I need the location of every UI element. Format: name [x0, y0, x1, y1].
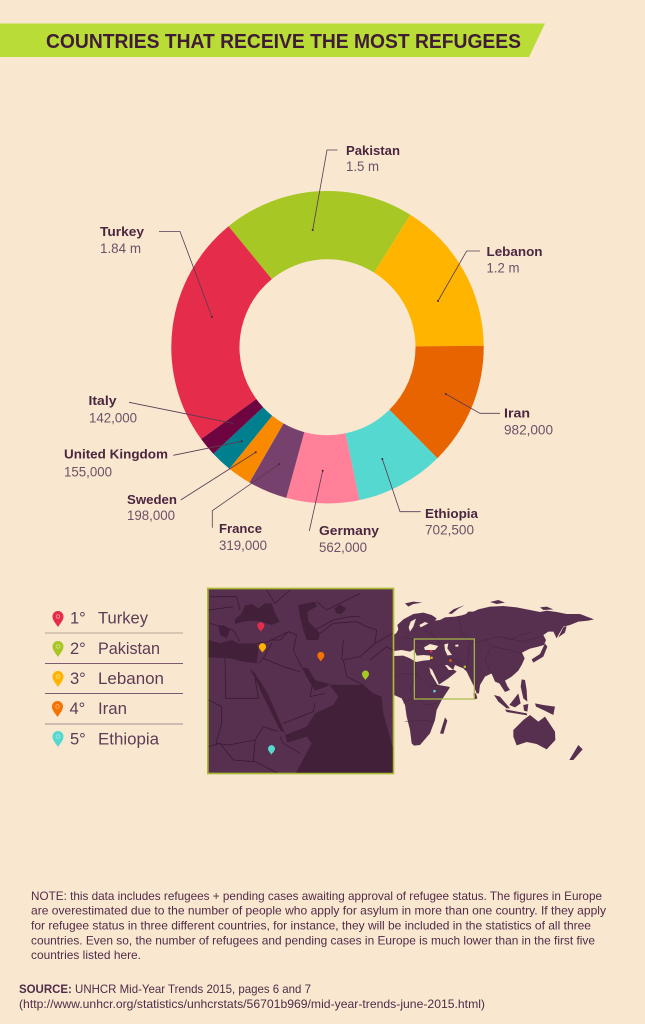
label: Germany: 562,000 — [319, 539, 367, 555]
label: Italy: 142,000 — [89, 410, 137, 426]
label: France — [212, 463, 280, 553]
label: Turkey: 1.84 m — [100, 240, 141, 256]
footnote: for refugee status in three different countries, for instance, they will be included in the statistics of all three — [31, 920, 591, 932]
segment: Iran — [389, 346, 484, 458]
label: Iran: Iran — [504, 406, 530, 420]
source — [19, 983, 485, 1011]
label: Pakistan: Pakistan — [346, 143, 400, 158]
pin: Lebanon — [259, 643, 266, 653]
donut chart — [171, 191, 484, 503]
inset locator box — [414, 639, 474, 699]
legend row: Pakistan — [52, 640, 160, 658]
label: Ethiopia — [381, 458, 479, 538]
footnote: NOTE: this data includes refugees + pending cases awaiting approval of refugee status. The figures in Europe — [31, 890, 602, 903]
source: (http://www.unhcr.org/statistics/unhcrstats/56701b969/mid-year-trends-june-2015.html) — [19, 998, 485, 1011]
segment: Sweden — [229, 416, 284, 482]
label: United Kingdom: 155,000 — [64, 464, 112, 480]
legend row: Lebanon: 3° — [70, 670, 86, 688]
legend row: Iran — [52, 700, 127, 718]
title banner — [0, 24, 545, 57]
locator dots — [430, 650, 466, 692]
pin: Turkey — [257, 622, 264, 632]
label: Iran — [445, 393, 553, 438]
legend row: Pakistan: Pakistan — [98, 640, 160, 658]
footnote: are overestimated due to the number of people who apply for asylum in more than one country. If they apply — [31, 904, 606, 918]
inset map: Middle East — [208, 588, 393, 773]
legend row: Turkey: Turkey — [98, 610, 149, 628]
label: Italy: Italy — [88, 393, 117, 408]
label: United Kingdom: United Kingdom — [64, 446, 168, 462]
label: Ethiopia: Ethiopia — [425, 506, 479, 521]
segment: Germany — [286, 432, 359, 503]
label: Italy — [88, 393, 234, 426]
legend row: Turkey — [52, 610, 149, 628]
footnote: countries. Even so, the number of refugees and pending cases in Europe is much lower than in the first five — [31, 934, 595, 948]
pin: Iran — [317, 652, 324, 661]
segment: Lebanon — [374, 215, 484, 346]
label: Sweden: 198,000 — [127, 507, 175, 523]
label: Germany — [309, 470, 380, 555]
label: Sweden — [127, 451, 257, 523]
label: Lebanon — [437, 244, 543, 302]
label: Lebanon: Lebanon — [486, 244, 543, 259]
segment: Turkey — [171, 226, 272, 439]
pin: Ethiopia — [268, 745, 275, 755]
water cut-outs — [394, 619, 458, 685]
label: Iran: 982,000 — [504, 422, 553, 438]
segment: France — [249, 423, 304, 498]
segment: United Kingdom — [213, 407, 272, 469]
legend row: Lebanon: Lebanon — [98, 670, 164, 688]
legend row: Turkey: 1° — [70, 610, 86, 628]
label: France: France — [219, 521, 262, 536]
legend row: Pakistan: 2° — [70, 640, 86, 658]
pin: Pakistan — [362, 670, 369, 680]
legend row: Ethiopia: Ethiopia — [98, 730, 160, 748]
segment: Ethiopia — [346, 410, 437, 500]
label: Germany: Germany — [319, 523, 380, 538]
label: Pakistan: 1.5 m — [346, 158, 379, 174]
label: Turkey — [100, 224, 213, 318]
title: COUNTRIES THAT RECEIVE THE MOST REFUGEES — [46, 30, 521, 53]
label: Pakistan — [312, 143, 400, 231]
legend row: Ethiopia — [52, 730, 160, 748]
source: SOURCE: UNHCR Mid-Year Trends 2015, pages 6 and 7 — [19, 983, 311, 996]
label: Ethiopia: 702,500 — [425, 522, 474, 538]
segment: Italy — [201, 399, 263, 454]
label: Lebanon: 1.2 m — [486, 260, 520, 276]
legend row: Iran: 4° — [70, 700, 85, 718]
label: United Kingdom — [64, 440, 243, 480]
legend: top five countries — [45, 610, 183, 748]
footnote: countries listed here. — [31, 949, 141, 962]
label: Sweden: Sweden — [127, 492, 177, 507]
label: Turkey: Turkey — [100, 224, 145, 239]
footnote — [31, 890, 606, 962]
label: France: 319,000 — [219, 537, 267, 553]
world map — [394, 600, 594, 760]
segment: Pakistan — [229, 191, 410, 279]
legend row: Ethiopia: 5° — [70, 730, 86, 748]
legend row: Iran: Iran — [98, 700, 127, 718]
legend row: Lebanon — [52, 670, 164, 688]
